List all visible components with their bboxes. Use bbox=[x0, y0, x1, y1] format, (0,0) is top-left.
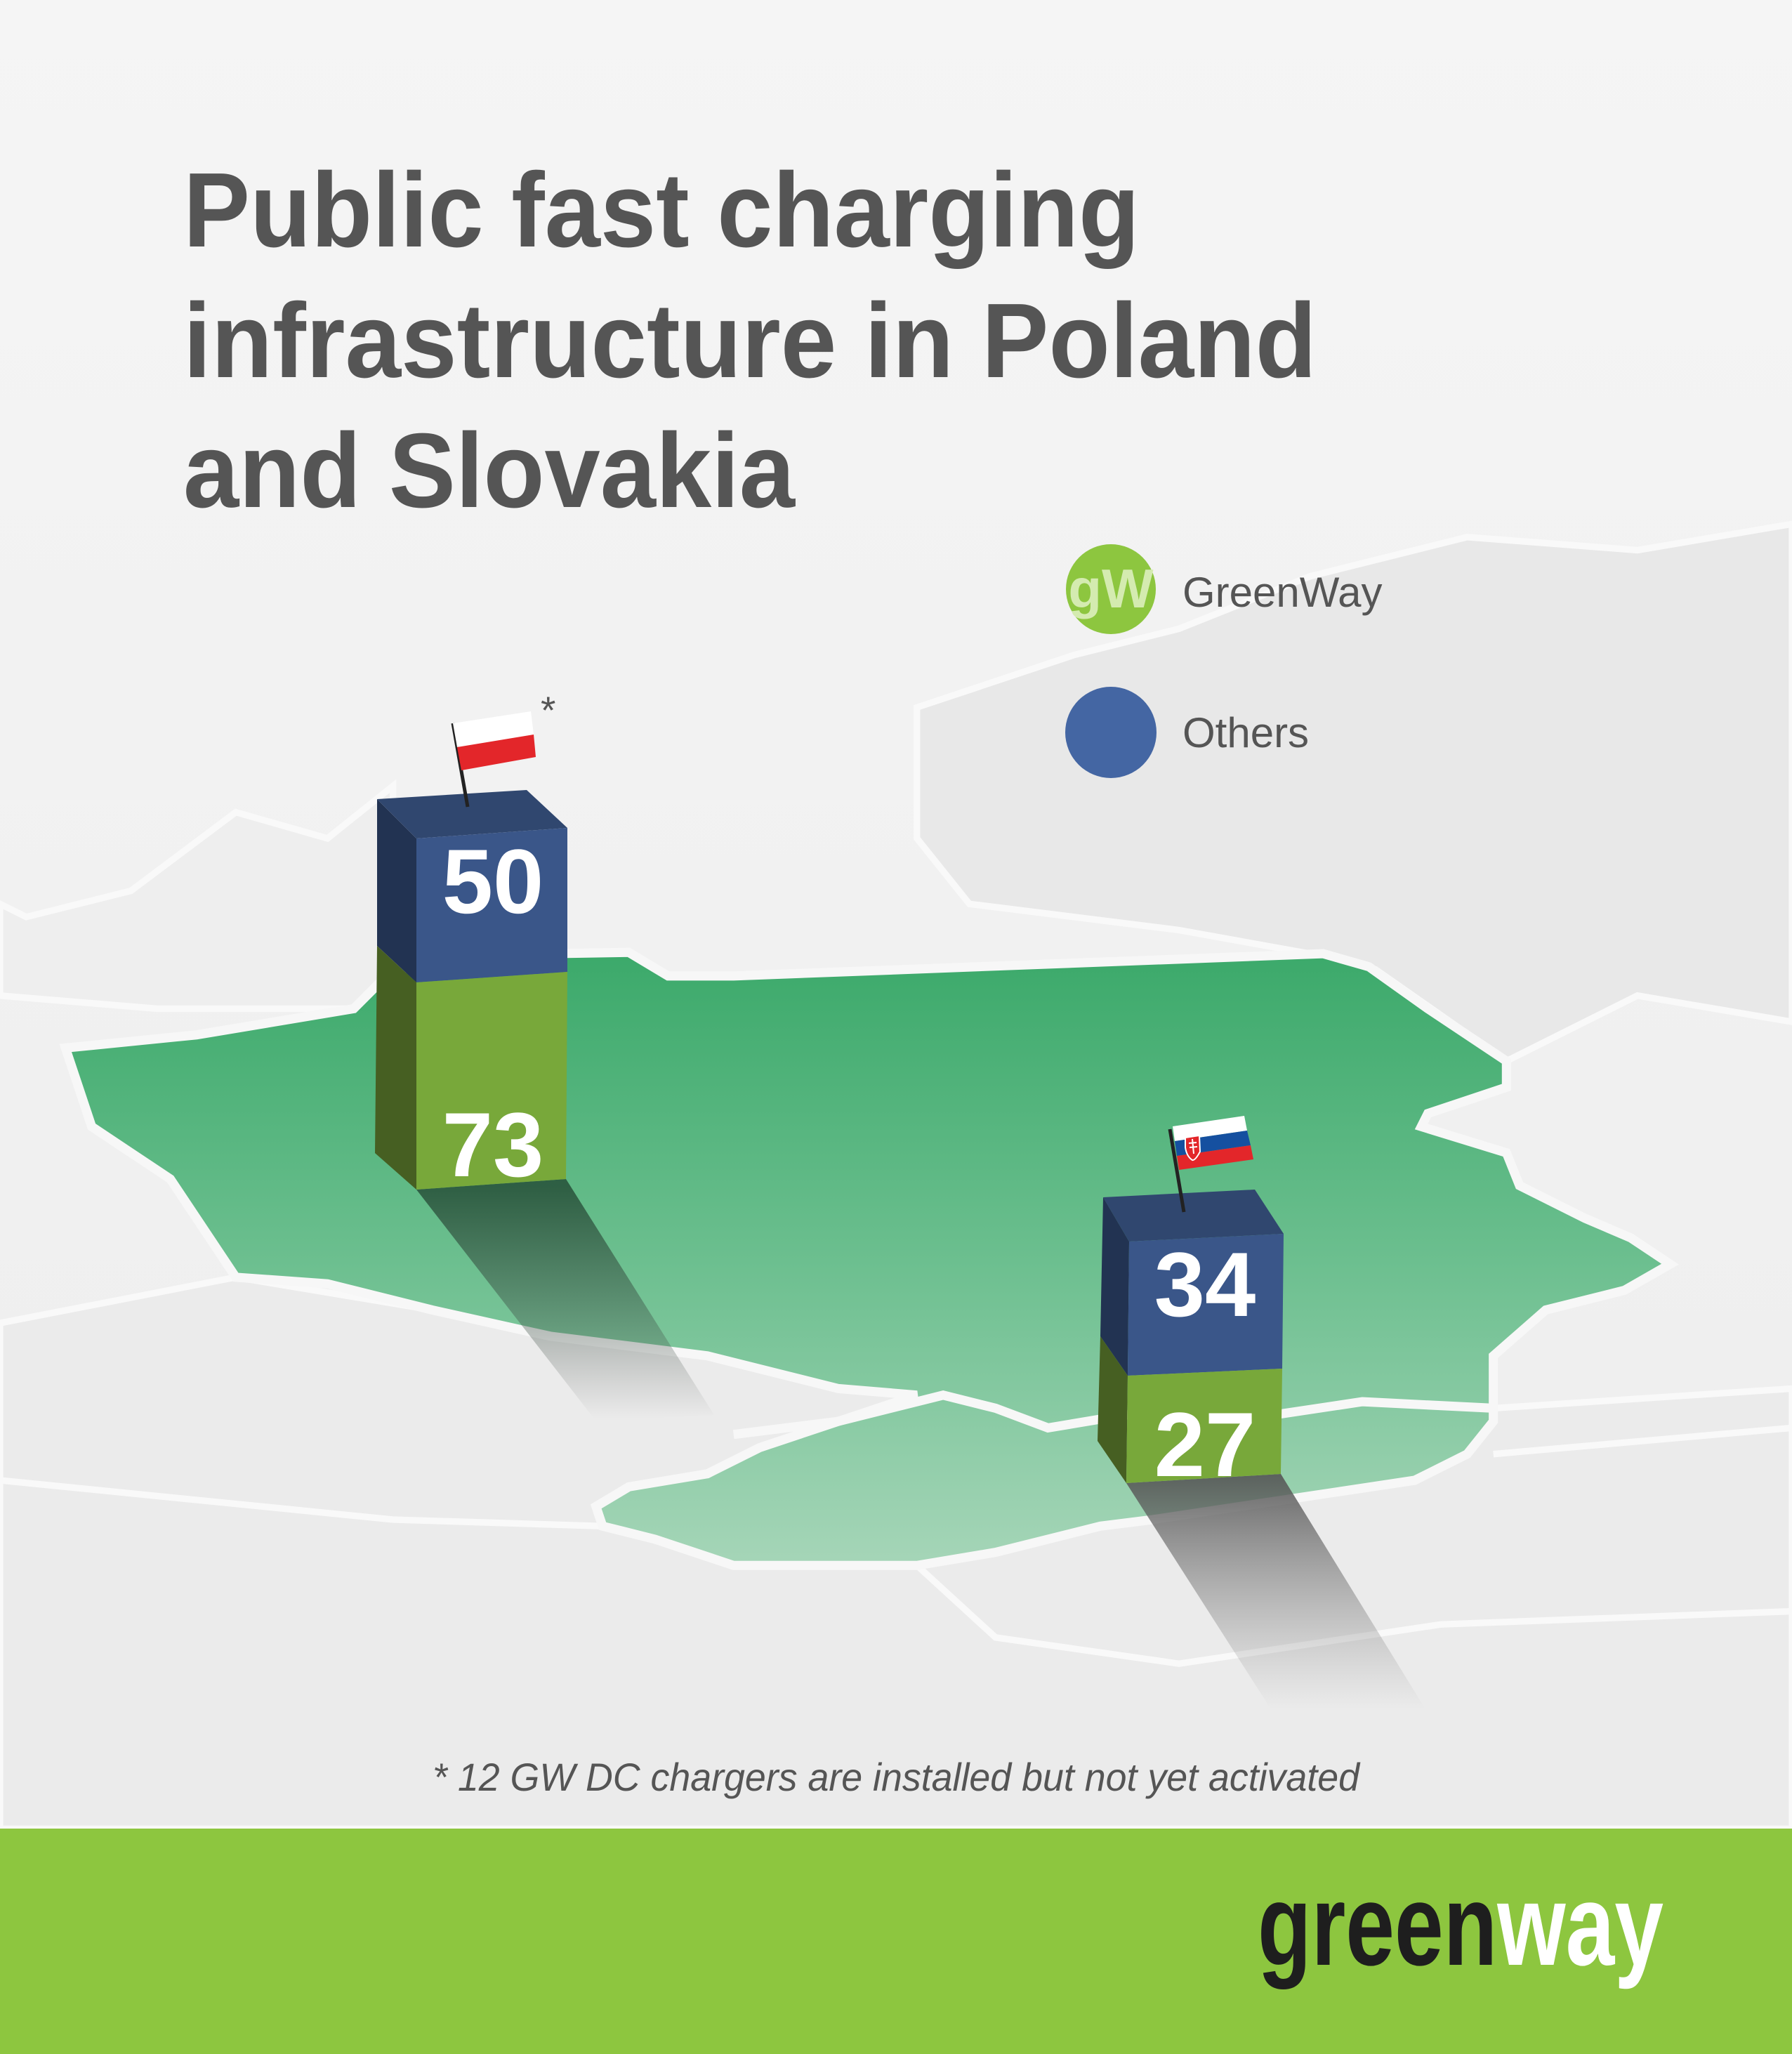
bar: Poland bbox=[375, 688, 714, 1421]
title bbox=[183, 150, 1317, 529]
legend label: Others: Others bbox=[1182, 709, 1309, 756]
icon: Slovak flag bbox=[1170, 1116, 1253, 1212]
map bbox=[0, 524, 1792, 1829]
bar: Poland: 50 bbox=[442, 830, 543, 933]
icon: Polish flag bbox=[453, 711, 536, 807]
title: infrastructure in Poland bbox=[183, 281, 1317, 400]
asterisk: * bbox=[541, 688, 555, 732]
map: Poland and Slovakia bbox=[65, 952, 1671, 1565]
bar: Slovakia: 27 bbox=[1154, 1393, 1256, 1496]
title: and Slovakia bbox=[183, 411, 796, 529]
title: Public fast charging bbox=[183, 150, 1140, 269]
logo: greenway: greenway bbox=[1258, 1860, 1663, 1989]
icon: GreenWay logo: gW bbox=[1068, 558, 1154, 619]
icon: Others circle bbox=[1065, 687, 1157, 778]
bar: Poland: 73 bbox=[442, 1093, 543, 1196]
legend label: GreenWay: GreenWay bbox=[1182, 569, 1383, 616]
bar: Slovakia bbox=[1098, 1116, 1425, 1709]
footer band bbox=[0, 1829, 1792, 2054]
bar: Slovakia: 34 bbox=[1154, 1233, 1256, 1336]
footnote: * 12 GW DC chargers are installed but not yet activated bbox=[433, 1755, 1361, 1799]
legend bbox=[1065, 544, 1383, 778]
icon: GreenWay logo bbox=[1066, 544, 1156, 634]
